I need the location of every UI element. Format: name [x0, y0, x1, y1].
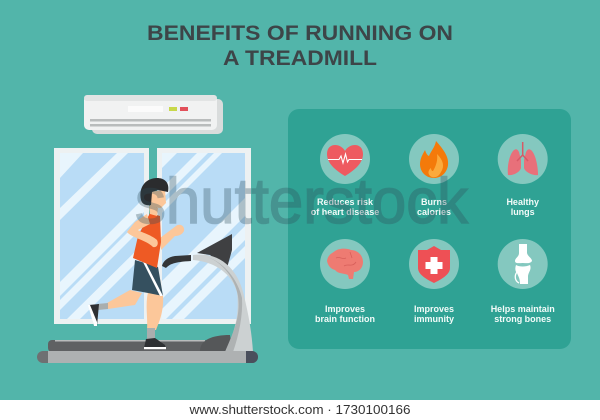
label: heart disease: Reduces risk [317, 197, 374, 207]
tank top [133, 213, 161, 268]
label: immunity: immunity [414, 314, 454, 324]
label: lungs: lungs [511, 207, 535, 217]
label: bones: Helps maintain [491, 304, 555, 314]
near arm [127, 214, 158, 247]
label: brain function: brain function [315, 314, 375, 324]
treadmill [37, 234, 258, 363]
label: bones [491, 304, 555, 324]
runner [88, 178, 184, 349]
icon: flame [409, 134, 459, 184]
label: bones: strong bones [494, 314, 551, 324]
footer credit: www.shutterstock.com · 1730100166 [188, 403, 411, 417]
head [149, 206, 158, 216]
title: BENEFITS OF RUNNING ON [147, 21, 453, 45]
icon: bone joint [498, 239, 548, 289]
title: A TREADMILL [223, 46, 377, 70]
label: calories: calories [417, 207, 451, 217]
far arm [160, 225, 184, 250]
left window [54, 148, 149, 324]
label: immunity [414, 304, 454, 324]
panel: benefits [288, 109, 571, 349]
back leg [107, 290, 142, 309]
front leg [147, 292, 163, 330]
icon: shield [409, 239, 459, 289]
label: heart disease: of heart disease [311, 207, 379, 217]
right window [157, 148, 251, 324]
watermark: shutterstock [135, 165, 469, 237]
label: brain function [315, 304, 375, 324]
label: calories [417, 197, 451, 217]
label: lungs [506, 197, 539, 217]
title [147, 21, 453, 70]
label: heart disease [311, 197, 379, 217]
label: lungs: Healthy [506, 197, 539, 207]
shorts [132, 260, 163, 296]
air conditioner [84, 95, 223, 134]
label: calories: Burns [421, 197, 447, 207]
label: brain function: Improves [325, 304, 365, 314]
icon: heart [320, 134, 370, 184]
label: immunity: Improves [414, 304, 454, 314]
icon: lungs [498, 134, 548, 184]
icon: brain [320, 239, 370, 289]
